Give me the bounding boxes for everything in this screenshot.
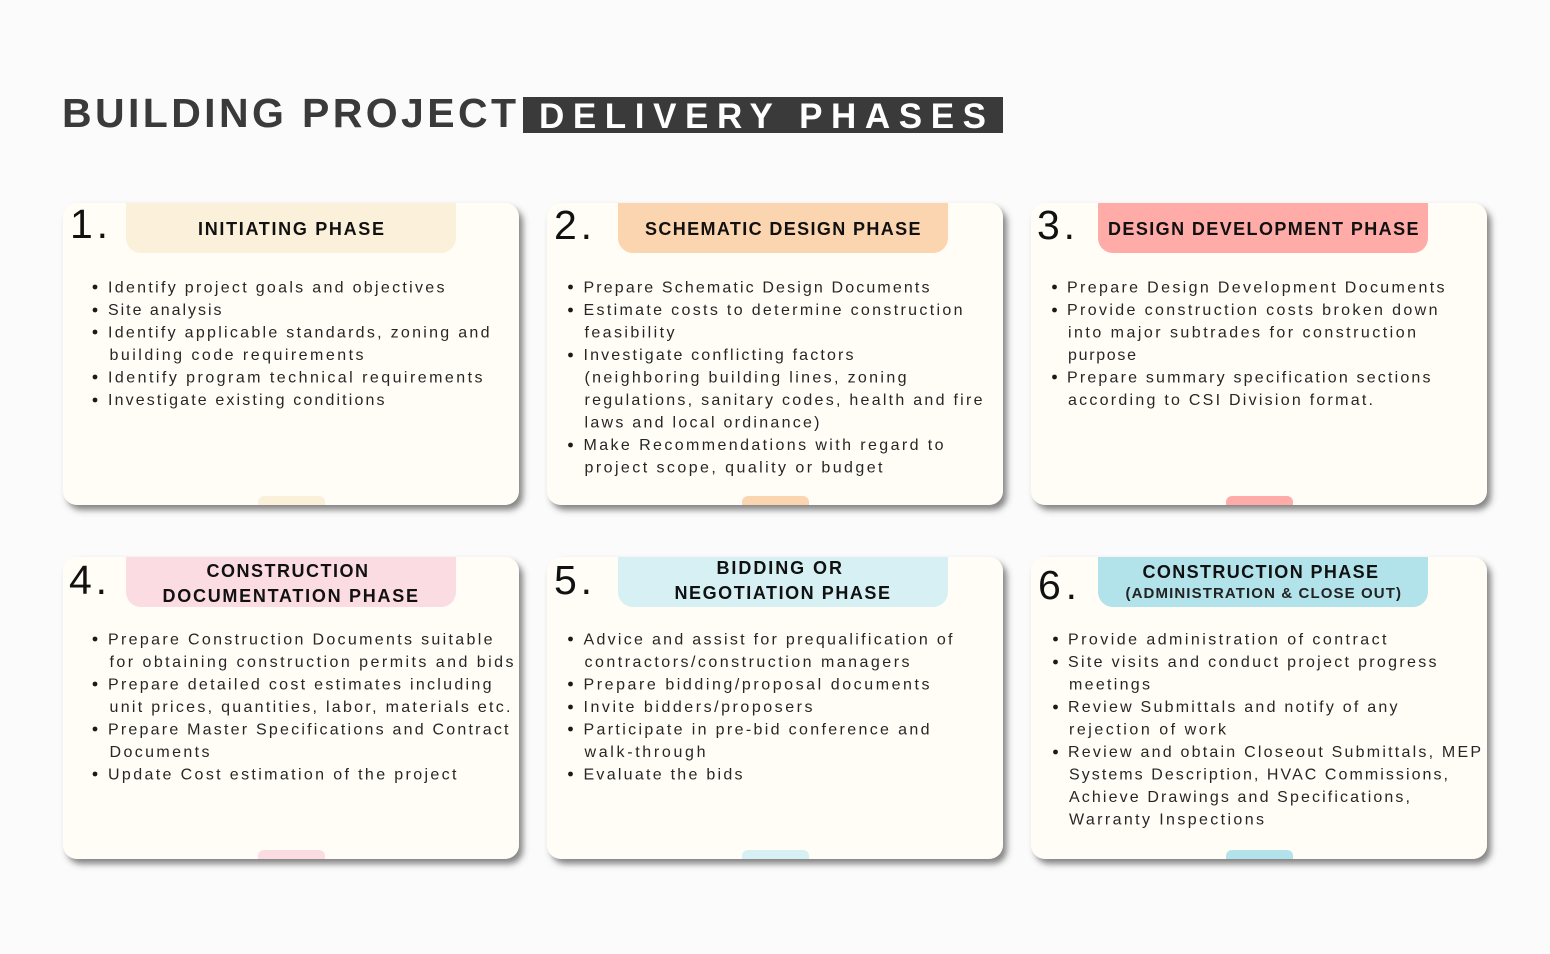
heading tab: bidding or negotiation phase — [618, 557, 948, 607]
bullet list: construction documentation tasks: Documents — [110, 744, 210, 761]
bullet list: design development tasks: purpose — [1068, 347, 1136, 364]
number 4: 4. — [69, 557, 107, 603]
bullet list: schematic design tasks: project scope, quality or budget — [584, 460, 883, 476]
heading tab: schematic design phase — [618, 203, 948, 253]
bullet list: construction documentation tasks — [93, 632, 513, 784]
bullet list: bidding tasks: walk-through — [584, 744, 706, 761]
bullet list: bidding tasks — [568, 632, 953, 784]
bottom tab — [258, 496, 325, 505]
bullet list: construction tasks: Systems Description, HVAC Commissions, — [1069, 766, 1448, 784]
bullet list: construction tasks — [1053, 632, 1481, 828]
title: building project: BUILDING PROJECT — [62, 90, 516, 136]
panel: 3 design development phase — [1031, 202, 1487, 505]
bullet list: schematic design tasks: Estimate costs to determine construction — [584, 302, 962, 319]
panel: 4 construction documentation phase — [63, 557, 519, 859]
bullet list: schematic design tasks: Prepare Schematic Design Documents — [584, 280, 930, 296]
page title — [62, 90, 1003, 136]
heading tab: construction documentation phase — [126, 557, 456, 607]
bullet list: construction documentation tasks: unit prices, quantities, labor, materials etc. — [110, 699, 510, 716]
heading tab: construction phase — [1098, 557, 1428, 607]
bullet list: initiating tasks: Investigate existing conditions — [108, 392, 384, 409]
bottom tab — [742, 496, 809, 505]
bullet list: initiating tasks: Identify program technical requirements — [108, 370, 483, 386]
bullet list: construction tasks: Review and obtain Closeout Submittals, MEP — [1068, 744, 1481, 761]
bullet list: construction tasks: rejection of work — [1069, 722, 1227, 738]
bullet list: bidding tasks: Prepare bidding/proposal documents — [584, 676, 930, 694]
bullet list: bidding tasks: Evaluate the bids — [584, 766, 742, 784]
bullet list: schematic design tasks: regulations, sanitary codes, health and fire — [584, 392, 983, 409]
heading tab: design development phase — [1098, 203, 1428, 253]
bottom tab — [1226, 850, 1293, 859]
bullet list: construction tasks: Review Submittals and notify of any — [1068, 699, 1398, 716]
bullet list: design development tasks: into major subtrades for construction — [1068, 324, 1416, 342]
number 6: 6. — [1038, 562, 1077, 608]
bullet list: design development tasks: Prepare Design Development Documents — [1067, 280, 1444, 296]
panel: 1 initiating phase — [63, 201, 519, 505]
heading tab: construction documentation phase: CONSTRUCTION — [206, 561, 368, 581]
heading tab: bidding or negotiation phase: NEGOTIATION PHASE — [674, 583, 890, 603]
heading tab: initiating phase — [126, 203, 456, 253]
bullet list: construction documentation tasks: Prepare Construction Documents suitable — [108, 632, 493, 648]
number 1: 1. — [70, 201, 108, 247]
heading tab: design development phase: DESIGN DEVELOPMENT PHASE — [1108, 219, 1418, 239]
heading tab: construction phase: (ADMINISTRATION & CLOSE OUT) — [1126, 585, 1401, 602]
bullet list: bidding tasks: Participate in pre-bid conference and — [584, 722, 930, 738]
bullet list: construction documentation tasks: Update Cost estimation of the project — [108, 766, 457, 784]
bullet list: initiating tasks: building code requirements — [110, 347, 364, 364]
heading tab: bidding or negotiation phase: BIDDING OR — [716, 558, 842, 578]
heading tab: construction documentation phase: DOCUMENTATION PHASE — [162, 586, 418, 606]
bullet list: bidding tasks: Invite bidders/proposers — [584, 699, 812, 716]
heading tab: construction phase: CONSTRUCTION PHASE — [1142, 562, 1378, 582]
bullet list: bidding tasks: Advice and assist for prequalification of — [584, 632, 953, 648]
bullet list: construction tasks: Achieve Drawings and Specifications, — [1069, 789, 1410, 806]
bottom tab — [742, 850, 809, 859]
bullet list: initiating tasks — [93, 280, 489, 409]
bullet list: schematic design tasks: Make Recommendations with regard to — [584, 437, 944, 454]
bullet list: construction documentation tasks: Prepare Master Specifications and Contract — [108, 722, 509, 738]
bullet list: schematic design tasks: Investigate conflicting factors — [584, 347, 854, 364]
number 5: 5. — [554, 557, 592, 603]
panel: 2 schematic design phase — [547, 202, 1003, 505]
number 2: 2. — [554, 202, 592, 248]
bullet list: bidding tasks: contractors/construction managers — [584, 654, 910, 671]
bullet list: construction documentation tasks: Prepare detailed cost estimates including — [108, 676, 492, 694]
number 3: 3. — [1037, 202, 1075, 248]
heading tab: initiating phase: INITIATING PHASE — [198, 219, 384, 239]
bullet list: schematic design tasks: (neighboring building lines, zoning — [584, 370, 906, 386]
panel: 5 bidding or negotiation phase — [547, 557, 1003, 859]
bullet list: initiating tasks: Identify applicable standards, zoning and — [108, 324, 490, 342]
bullet list: initiating tasks: Identify project goals and objectives — [108, 280, 444, 296]
bullet list: design development tasks: according to CSI Division format. — [1068, 392, 1373, 409]
bullet list: construction tasks: Provide administration of contract — [1068, 632, 1387, 648]
bullet list: construction tasks: meetings — [1069, 676, 1150, 694]
panel: 6 construction phase — [1031, 557, 1487, 859]
bullet list: construction documentation tasks: for obtaining construction permits and bids — [110, 654, 514, 671]
bullet list: schematic design tasks: feasibility — [584, 324, 674, 342]
heading tab: schematic design phase: SCHEMATIC DESIGN PHASE — [645, 219, 920, 239]
bottom tab — [258, 850, 325, 859]
bullet list: construction tasks: Site visits and conduct project progress — [1068, 654, 1436, 671]
bullet list: design development tasks: Prepare summary specification sections — [1067, 370, 1430, 386]
bullet list: design development tasks: Provide construction costs broken down — [1067, 302, 1438, 319]
bullet list: design development tasks — [1052, 280, 1444, 409]
bullet list: construction tasks: Warranty Inspections — [1069, 812, 1264, 828]
bullet list: initiating tasks: Site analysis — [108, 302, 222, 319]
bullet list: schematic design tasks: laws and local ordinance) — [584, 414, 820, 432]
bottom tab — [1226, 496, 1293, 505]
title band: delivery phases: DELIVERY PHASES — [539, 97, 986, 136]
bullet list: schematic design tasks — [568, 280, 983, 476]
